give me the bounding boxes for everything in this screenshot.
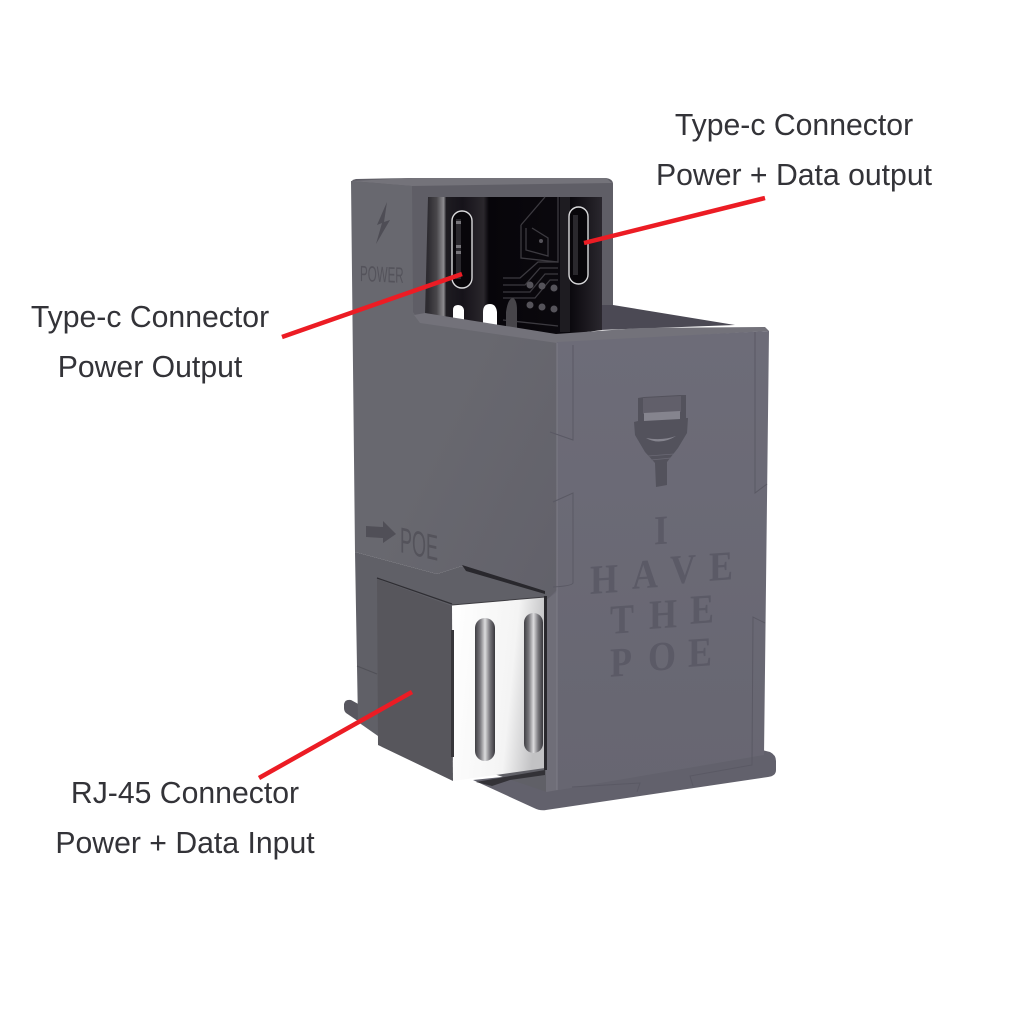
RJ-45 connector: [377, 565, 547, 781]
callout line: RJ-45 port: [259, 692, 412, 778]
top rim highlight: [351, 178, 612, 186]
slit above jack: [462, 565, 545, 594]
USB-C port right: [569, 207, 588, 284]
label: Type-c power and data output: Type-c Connector: [675, 109, 913, 142]
shadow under jack: [476, 770, 545, 786]
circuit board solder pads: [526, 239, 558, 312]
engraved slogan: E: [688, 629, 712, 676]
rim in front of the cavity: [414, 313, 769, 343]
lower left face: [355, 552, 547, 792]
label: Type-c power output: Type-c Connector: [31, 301, 269, 334]
power bolt icon: [376, 202, 390, 244]
label: RJ-45 power and data input: RJ-45 Connector: [71, 777, 299, 810]
metal face: [452, 597, 545, 781]
POE label: POE: [400, 521, 438, 570]
engraved slogan: E: [690, 586, 714, 633]
device: PoE splitter enclosure: [344, 178, 776, 810]
front face: [547, 331, 769, 792]
seams: [550, 332, 767, 792]
engraved slogan: P: [610, 639, 632, 686]
standoff strip: [560, 197, 570, 332]
jack side: [377, 579, 453, 781]
back block: [351, 178, 613, 330]
label: RJ-45 power and data input: [55, 777, 315, 860]
POE arrow: [366, 521, 396, 543]
metal slots: [475, 618, 495, 761]
top ledge shadow: [600, 305, 735, 330]
label: Type-c power and data output: [656, 109, 933, 192]
base flange: [344, 700, 776, 810]
engraved slogan: A: [632, 551, 658, 599]
label: Type-c power and data output: Power + Data output: [656, 159, 933, 192]
opening: port cavity: [425, 197, 602, 336]
circuit board traces: [503, 197, 558, 326]
emblem: Ethernet plug with smile: [634, 395, 688, 487]
POWER label: POWER: [360, 261, 404, 288]
light slots: [453, 298, 517, 332]
front edge bevel: [546, 592, 557, 792]
engraved slogan: E: [709, 543, 733, 590]
callout line: power output port: [282, 274, 462, 337]
USB-C port left: [452, 211, 472, 288]
engraved slogan: O: [648, 633, 676, 681]
crease above the flange: [357, 666, 377, 674]
engraved slogan: H: [649, 591, 677, 639]
engraved slogan: T: [610, 596, 634, 643]
label: Type-c power output: [31, 301, 269, 384]
engraved slogan: V: [670, 546, 696, 594]
callout line: data output port: [584, 198, 765, 243]
engraved slogan: [590, 507, 733, 686]
left side face: [351, 181, 557, 600]
label: Type-c power output: Power Output: [58, 351, 243, 384]
engraved slogan: I: [654, 507, 668, 554]
label: RJ-45 power and data input: Power + Data Input: [55, 827, 315, 860]
engraved slogan: H: [590, 556, 618, 604]
